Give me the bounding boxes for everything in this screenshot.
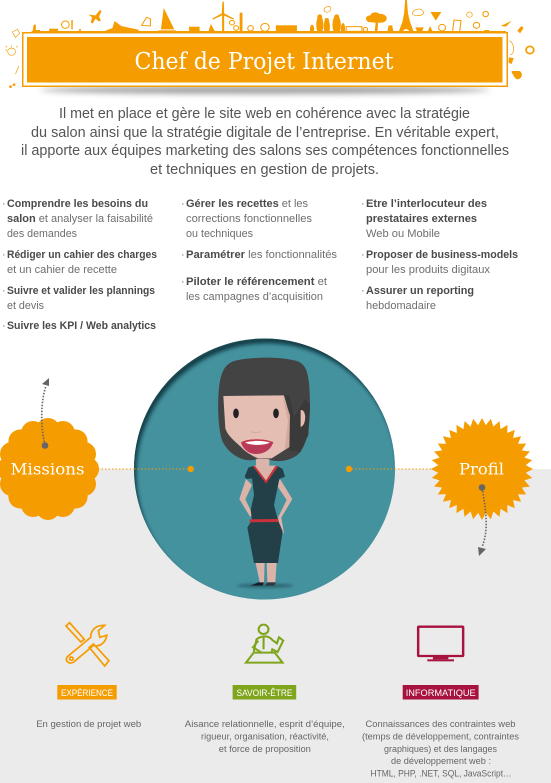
mission list: column 2: · <box>181 249 185 261</box>
collar <box>254 466 277 483</box>
mission list: column 1: Rédiger un cahier des charges <box>7 249 157 261</box>
eyes <box>233 408 239 418</box>
mission list: column 2: Gérer les recettes et les <box>186 198 308 210</box>
nose <box>251 430 261 434</box>
teal portrait circle <box>133 338 401 608</box>
text: informatique: HTML, PHP, .NET, SQL, JavaScript… <box>370 768 512 780</box>
mission list: column 3: hebdomadaire <box>366 300 436 312</box>
intro paragraph: du salon ainsi que la stratégie digitale de l’entreprise. En véritable expert, <box>31 124 499 141</box>
ground shadow <box>237 583 293 588</box>
mission list: column 1: · <box>2 198 6 210</box>
text: informatique: graphiques) et des langages <box>384 744 497 755</box>
icon: group of people <box>310 14 345 36</box>
dress <box>245 466 285 563</box>
tag: savoir-etre <box>233 685 296 700</box>
mission list: column 1: salon et analyser la faisabilité <box>7 213 153 225</box>
mission list: column 1: et devis <box>7 300 44 312</box>
text: informatique: (temps de développement, contraintes <box>362 732 519 742</box>
mission list: column 1: et un cahier de recette <box>7 264 117 276</box>
hair <box>218 358 310 461</box>
mission list: column 1: des demandes <box>7 228 77 240</box>
mission list: column 3: Etre l’interlocuteur des <box>366 198 487 210</box>
mission list: column 3: Assurer un reporting <box>366 285 474 297</box>
intro paragraph: Il met en place et gère le site web en cohérence avec la stratégie <box>59 105 470 122</box>
intro paragraph <box>21 105 509 178</box>
badge: Missions <box>0 418 99 520</box>
mission list: column 2: les campagnes d’acquisition <box>186 291 323 303</box>
tag: experience: EXPÉRIENCE <box>61 688 113 699</box>
label: Profil <box>459 460 504 478</box>
mission list: column 3: Proposer de business-models <box>366 249 518 261</box>
neck <box>256 455 269 469</box>
connector dot left <box>188 466 194 472</box>
icon: person at desk (savoir-etre) <box>246 625 283 663</box>
small icons <box>5 6 534 88</box>
text: savoir-etre: et force de proposition <box>219 744 311 755</box>
background: lower grey band <box>0 469 551 783</box>
hair lock <box>284 395 310 452</box>
belt <box>249 519 278 522</box>
mission list: column 2: · <box>181 276 185 288</box>
icon: plane <box>89 10 102 23</box>
shoes <box>251 582 264 586</box>
text: savoir-etre: rigueur, organisation, réactivité, <box>201 732 329 742</box>
tag: informatique: INFORMATIQUE <box>406 688 476 699</box>
banner shadow <box>40 86 490 94</box>
mission list: column 1: · <box>2 285 6 297</box>
intro paragraph: et techniques en gestion de projets. <box>150 161 379 178</box>
icon: tree <box>366 12 387 32</box>
icon: sailboat <box>158 8 176 33</box>
mission list: column 1: Suivre les KPI / Web analytics <box>7 320 156 332</box>
icon: wind turbine <box>212 2 234 32</box>
arrow: Profil downward <box>478 484 486 556</box>
mission list: column 2: Paramétrer les fonctionnalités <box>186 249 338 261</box>
text: experience: En gestion de projet web <box>36 719 141 730</box>
text: informatique: de développement web : <box>391 756 491 767</box>
mission list: column 2 <box>181 198 338 303</box>
mission list: column 1: Suivre et valider les plannings <box>7 285 155 297</box>
mission list: column 1: · <box>2 320 6 332</box>
mouth <box>241 439 273 454</box>
icon: tools (experience) <box>66 623 109 666</box>
title: Chef de Projet Internet <box>134 49 394 75</box>
mission list: column 1: · <box>2 249 6 261</box>
mission list: column 2: · <box>181 198 185 210</box>
mission list: column 3: pour les produits digitaux <box>366 264 491 276</box>
icon: Eiffel tower <box>398 0 414 32</box>
text: savoir-etre: Aisance relationnelle, esprit d’équipe, <box>185 719 345 730</box>
icon: monitor (informatique) <box>418 627 463 661</box>
text: informatique: Connaissances des contraintes web <box>366 719 516 730</box>
mission list: column 2: corrections fonctionnelles <box>186 213 313 225</box>
mission list: column 2: ou techniques <box>186 228 253 240</box>
skyline icons above the banner <box>5 0 534 88</box>
arrow: Missions upward <box>42 378 49 449</box>
text: savoir-etre <box>185 719 345 755</box>
mission list: column 3: · <box>361 198 365 210</box>
connector dot right <box>346 466 352 472</box>
legs <box>255 562 265 583</box>
text: informatique <box>362 719 519 780</box>
face <box>223 395 290 459</box>
mission list: column 1 <box>2 198 157 332</box>
title banner <box>22 32 508 87</box>
mission list: column 3 <box>361 198 518 312</box>
character: woman <box>218 358 310 588</box>
arms <box>239 479 253 517</box>
connector: Missions to circle <box>98 468 190 470</box>
ear <box>301 410 305 427</box>
mission list: column 3: Web ou Mobile <box>366 228 440 240</box>
label: Missions <box>10 460 85 478</box>
mission list: column 3: prestataires externes <box>366 213 477 225</box>
mission list: column 3: · <box>361 249 365 261</box>
intro paragraph: il apporte aux équipes marketing des salons ses compétences fonctionnelles <box>21 142 509 159</box>
icon: yacht <box>101 21 140 32</box>
mission list: column 1: Comprendre les besoins du <box>7 198 148 210</box>
badge: Profil <box>424 411 540 527</box>
tag: experience <box>57 685 117 700</box>
mission list: column 2: Piloter le référencement et <box>186 276 327 288</box>
mission list: column 3: · <box>361 285 365 297</box>
connector: circle to Profil <box>349 468 435 470</box>
tag: savoir-etre: SAVOIR-ÊTRE <box>236 688 292 699</box>
